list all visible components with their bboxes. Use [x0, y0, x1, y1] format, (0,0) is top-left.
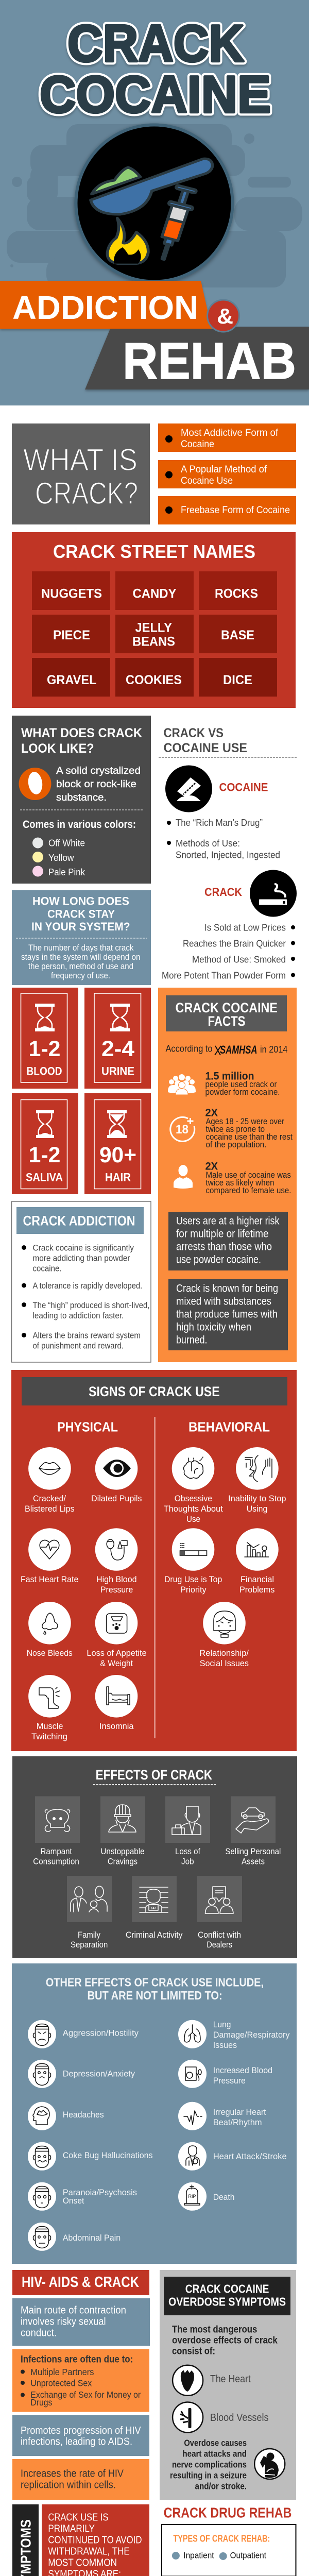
heading	[21, 726, 142, 756]
stat: blood 1-2: BLOOD	[27, 1064, 62, 1078]
text block: infections: Exchange of Sex for Money or	[30, 2389, 141, 2400]
fact: ages 18-25: twice as prone to	[206, 1125, 265, 1134]
effect: paranoia: Onset	[63, 2196, 84, 2206]
fact: 1.5 million: people used crack or	[205, 1080, 277, 1089]
text block: promotes progression: Promotes progression of HIV	[21, 2425, 141, 2436]
fact: 1.5 million	[205, 1071, 280, 1097]
panel: other effects of crack use	[12, 1963, 297, 2264]
effect: abdominal pain	[28, 2223, 121, 2251]
effect: paranoia: Paranoia/Psychosis	[63, 2188, 137, 2197]
heading: EFFECTS OF CRACK	[96, 1767, 212, 1783]
cocaine list: Snorted, Injected, Ingested	[176, 850, 280, 860]
fact: male use: compared to female use.	[206, 1186, 291, 1195]
effect: headaches: Headaches	[63, 2110, 104, 2120]
sign: cracked lips: Cracked/	[33, 1494, 66, 1503]
sign: cracked lips: Blistered Lips	[25, 1504, 75, 1514]
effect: depression	[28, 2060, 135, 2088]
callout: toxic fumes: mixed with substances	[176, 1295, 271, 1308]
heading: OTHER EFFECTS OF CRACK USE INCLUDE,	[46, 1975, 264, 1989]
effect: irregular heart beat: Beat/Rhythm	[213, 2117, 262, 2127]
column headings: PHYSICAL	[57, 1419, 118, 1434]
heading: CRACK STAY	[47, 908, 115, 920]
text block: infections	[12, 2349, 149, 2412]
text block: infections: Multiple Partners	[30, 2367, 94, 2377]
source line: According to	[166, 1044, 212, 1054]
icon: blood vessels	[173, 2402, 203, 2433]
source line	[166, 1043, 287, 1056]
smoke shapes behind the icon	[7, 124, 302, 287]
heading	[22, 1377, 287, 1405]
sign: relationship issues: Social Issues	[200, 1658, 249, 1668]
fact: ages 18-25: cocaine use than the rest	[206, 1132, 293, 1142]
panel: what is crack bullets: Cocaine Use	[181, 475, 233, 486]
consequence text: nerve complications	[172, 2460, 247, 2470]
sign: insomnia: Insomnia	[99, 1721, 134, 1731]
stat: saliva 1-2: SALIVA	[26, 1171, 63, 1184]
heading: HIV- AIDS & CRACK	[22, 2274, 139, 2291]
banner: addiction	[0, 281, 212, 329]
description: stays in the system will depend on	[21, 953, 140, 962]
effect: lung damage: Damage/Respiratory	[213, 2030, 290, 2040]
bullet list: leading to addiction faster.	[33, 1311, 124, 1320]
effect: family separation: Separation	[71, 1940, 108, 1950]
colors list	[23, 819, 136, 877]
sign: obsessive thoughts	[164, 1447, 223, 1524]
heading: SIGNS OF CRACK USE	[89, 1384, 220, 1399]
crack label: CRACK	[204, 886, 242, 899]
stat: blood 1-2	[12, 988, 78, 1089]
crack list: Is Sold at Low Prices	[204, 922, 286, 933]
heading	[164, 726, 247, 755]
consequence text: heart attacks and	[182, 2448, 247, 2459]
description	[21, 943, 140, 980]
title: crack cocaine: COCAINE	[40, 66, 271, 124]
effect: conflict with dealers: Conflict with	[198, 1930, 241, 1940]
box: types of rehab: TYPES OF CRACK REHAB:	[173, 2534, 270, 2544]
panel: overdose symptoms: Blood Vessels	[210, 2412, 269, 2424]
sign: loss of appetite	[87, 1602, 147, 1668]
column headings	[57, 1419, 270, 1434]
effect: lung damage	[178, 2020, 290, 2050]
title: crack cocaine	[40, 15, 271, 124]
effect: heart attack or stroke: Heart Attack/Stroke	[213, 2151, 287, 2161]
consequence text	[170, 2438, 247, 2492]
panel: crack street names: COOKIES	[126, 673, 182, 687]
fact: male use: twice as likely when	[206, 1178, 274, 1188]
heading	[164, 2277, 290, 2315]
fact: 1.5 million: 1.5 million	[205, 1071, 254, 1082]
panel: overdose symptoms	[160, 2270, 296, 2500]
effect: criminal activity	[126, 1876, 183, 1940]
bullet list: Crack cocaine is significantly	[33, 1243, 134, 1253]
bullet list	[22, 1243, 149, 1351]
intro text: CRACK USE IS	[48, 2512, 108, 2523]
description: block or rock-like	[56, 779, 136, 790]
column headings: BEHAVIORAL	[188, 1419, 270, 1434]
heading: CRACK COCAINE	[175, 1000, 278, 1015]
sign: insomnia	[95, 1675, 138, 1731]
effect: unstoppable cravings: Unstoppable	[101, 1847, 144, 1856]
sign: fast heart rate: Fast Heart Rate	[21, 1574, 78, 1584]
box: types of rehab: Inpatient	[183, 2550, 214, 2561]
ampersand badge: &	[217, 304, 233, 328]
heading: CRACK VS	[164, 726, 224, 740]
intro text	[172, 2325, 278, 2357]
callout: toxic fumes: high toxicity when	[176, 1321, 251, 1333]
effect: coke bug hallucinations: Coke Bug Hallucinations	[63, 2150, 153, 2160]
box: types of rehab	[162, 2524, 296, 2576]
heading	[31, 894, 130, 933]
sign: financial problems: Problems	[239, 1585, 274, 1595]
icon: crack rock	[19, 768, 52, 800]
stat: hair 90+: 90+	[99, 1143, 136, 1167]
effect: loss of job	[165, 1796, 210, 1866]
text block: infections: Infections are often due to:	[21, 2353, 133, 2365]
panel: crack street names: NUGGETS	[41, 586, 102, 601]
stat: urine 2-4: 2-4	[101, 1037, 134, 1061]
panel: crack street names: GRAVEL	[47, 673, 97, 687]
callout: toxic fumes: Crack is known for being	[176, 1283, 278, 1294]
callout: toxic fumes	[168, 1279, 288, 1350]
effect: rampant consumption: Rampant	[40, 1847, 72, 1856]
description: the person, method of use and	[28, 962, 133, 971]
panel: crack street names	[12, 532, 296, 708]
bullet list: Alters the brains reward system	[33, 1330, 141, 1341]
heading	[46, 1975, 264, 2002]
panel: crack cocaine facts	[158, 988, 297, 1362]
cocaine list: The “Rich Man’s Drug”	[176, 818, 263, 828]
callout: arrests: use powder cocaine.	[176, 1254, 261, 1265]
fact: male use: 2X	[205, 1160, 218, 1173]
description: substance.	[56, 792, 107, 803]
icon: spoon, flame and syringe in a black circle	[74, 124, 234, 283]
sign: high blood pressure: Pressure	[100, 1585, 133, 1595]
panel: how long does crack stay	[12, 890, 151, 985]
effect: conflict with dealers	[197, 1876, 242, 1950]
panel: what is crack bullets: Cocaine	[181, 438, 214, 450]
heading: CRACK STREET NAMES	[53, 541, 255, 562]
heading	[16, 1207, 144, 1234]
effect: depression: Depression/Anxiety	[63, 2069, 135, 2078]
title: crack cocaine: COCAINE	[40, 66, 271, 124]
effect: death	[178, 2182, 234, 2211]
crack list: Method of Use: Smoked	[192, 954, 286, 964]
text block: main route: Main route of contraction	[21, 2305, 126, 2316]
cocaine list	[167, 818, 280, 860]
sign: loss of appetite: & Weight	[100, 1658, 133, 1668]
icon: smoking cigarette	[250, 870, 297, 917]
panel: hiv aids and crack	[12, 2270, 150, 2500]
sign: cracked lips	[25, 1447, 75, 1514]
stat: hair 90+	[84, 1093, 151, 1194]
fact: ages 18-25	[205, 1107, 293, 1149]
heading: CRACK ADDICTION	[23, 1213, 135, 1228]
effect: increased blood pressure: Increased Blood	[213, 2065, 272, 2075]
text block: main route: conduct.	[21, 2328, 57, 2339]
effect: unstoppable cravings: Cravings	[108, 1857, 138, 1866]
title: crack cocaine: CRACK	[67, 15, 244, 73]
callout: toxic fumes: burned.	[176, 1334, 207, 1346]
sign: dilated pupils	[91, 1447, 142, 1503]
sign: fast heart rate	[21, 1528, 78, 1584]
callout: toxic fumes: that produce fumes with	[176, 1309, 278, 1320]
effect: irregular heart beat	[178, 2102, 266, 2130]
sign: drug use top priority	[164, 1528, 222, 1595]
text block: infections: Unprotected Sex	[30, 2378, 92, 2388]
bullet list: The “high” produced is short-lived,	[33, 1300, 149, 1310]
intro text: MOST COMMON	[48, 2557, 117, 2569]
consequence text: Overdose causes	[184, 2438, 247, 2448]
icon: hourglass	[35, 1004, 55, 1031]
banner: addiction: ADDICTION	[12, 289, 198, 326]
banner: rehab: REHAB	[123, 332, 296, 390]
effect: selling personal assets: Selling Personal	[225, 1847, 281, 1856]
stat: hair 90+: HAIR	[105, 1171, 131, 1184]
effect: selling personal assets	[225, 1796, 281, 1866]
panel: what is crack bullets: Freebase Form of Cocaine	[181, 504, 290, 516]
sign: muscle twitching: Twitching	[31, 1732, 67, 1741]
effect: coke bug hallucinations	[28, 2142, 153, 2171]
sign: nose bleeds: Nose Bleeds	[27, 1648, 73, 1658]
stat: urine 2-4: URINE	[101, 1064, 134, 1078]
consequence text: resulting in a seizure	[170, 2470, 247, 2480]
effect: selling personal assets: Assets	[242, 1857, 265, 1866]
panel: effects of crack	[12, 1756, 297, 1958]
text block: promotes progression	[12, 2415, 149, 2456]
text block: promotes progression: infections, leading to AIDS.	[21, 2436, 132, 2447]
bullet list: more addicting than powder	[33, 1253, 130, 1263]
panel: crack street names: JELLY	[135, 620, 172, 635]
effect: irregular heart beat: Irregular Heart	[213, 2107, 266, 2117]
effect: heart attack or stroke	[178, 2142, 287, 2171]
source line: SAMHSA	[220, 1043, 258, 1056]
bullet list: of punishment and reward.	[33, 1341, 124, 1351]
panel: what is crack bullets: A Popular Method of	[181, 464, 267, 475]
effect: family separation: Family	[78, 1930, 101, 1940]
description: A solid crystalized	[56, 766, 141, 776]
text block: replication: replication within cells.	[21, 2479, 116, 2490]
heading: BUT ARE NOT LIMITED TO:	[88, 1989, 222, 2002]
heading: OVERDOSE SYMPTOMS	[168, 2295, 286, 2308]
intro text: The most dangerous	[172, 2325, 257, 2335]
panel: crack street names: ROCKS	[215, 586, 258, 601]
sign: high blood pressure	[95, 1528, 138, 1595]
box: types of rehab: Outpatient	[230, 2550, 266, 2561]
effect: criminal activity: Criminal Activity	[126, 1930, 183, 1940]
effect: family separation	[67, 1876, 112, 1950]
effect: lung damage: Issues	[213, 2040, 237, 2050]
fact: ages 18-25: Ages 18 - 25 were over	[206, 1117, 284, 1126]
sign: muscle twitching	[28, 1675, 71, 1741]
icon: hourglass	[107, 1110, 127, 1138]
fact: 1.5 million: powder form cocaine.	[205, 1088, 280, 1097]
colors list: Pale Pink	[48, 867, 85, 877]
colors list: Off White	[48, 838, 85, 848]
sign: loss of appetite: Loss of Appetite	[87, 1648, 147, 1658]
icon: male figure	[174, 1165, 193, 1189]
sign: muscle twitching: Muscle	[37, 1721, 63, 1731]
sign: inability to stop: Using	[247, 1504, 267, 1514]
sign: nose bleeds	[27, 1602, 73, 1658]
crack list	[162, 922, 295, 981]
stat: blood 1-2: 1-2	[29, 1037, 61, 1061]
effect: rampant consumption: Consumption	[33, 1857, 79, 1866]
icon: hourglass	[36, 1110, 54, 1138]
heading	[166, 995, 287, 1031]
ampersand badge	[208, 300, 239, 332]
intro text	[48, 2512, 142, 2576]
heading: CRACK COCAINE	[185, 2282, 269, 2296]
effect: headaches	[28, 2102, 104, 2130]
panel: crack vs cocaine use	[159, 726, 297, 981]
text block: main route	[12, 2298, 150, 2346]
intro text: CONTINUED TO AVOID	[48, 2535, 142, 2546]
text block: infections: Drugs	[30, 2397, 53, 2408]
heading: LOOK LIKE?	[21, 741, 94, 756]
text block: replication: Increases the rate of HIV	[21, 2468, 124, 2479]
stat: saliva 1-2	[12, 1093, 78, 1194]
bullet list: A tolerance is rapidly developed.	[33, 1281, 142, 1291]
effect: abdominal pain: Abdominal Pain	[63, 2233, 121, 2243]
cocaine label: COCAINE	[219, 781, 268, 793]
fact: ages 18-25: 2X	[205, 1107, 218, 1119]
effect: paranoia	[28, 2182, 137, 2211]
heading: FACTS	[208, 1013, 245, 1029]
crack list: Reaches the Brain Quicker	[183, 939, 286, 949]
panel: crack addiction	[11, 1201, 151, 1362]
text block: replication	[12, 2459, 149, 2500]
effect: rampant consumption	[33, 1796, 80, 1866]
title: crack cocaine: CRACK	[67, 15, 244, 73]
icon: 18 plus	[170, 1117, 195, 1141]
fact: ages 18-25: of the population.	[206, 1140, 267, 1149]
sign: high blood pressure: High Blood	[96, 1574, 137, 1584]
heading: HOW LONG DOES	[32, 894, 129, 908]
effect: aggression: Aggression/Hostility	[63, 2028, 139, 2038]
consequence text: and/or stroke.	[195, 2481, 247, 2492]
heading: COCAINE USE	[164, 741, 247, 755]
colors list: Comes in various colors:	[23, 819, 136, 831]
panel: crack street names: CANDY	[133, 586, 177, 601]
panel: what is crack bullets	[158, 423, 296, 524]
text block: main route: involves risky sexual	[21, 2316, 106, 2328]
panel: what does crack look like	[12, 716, 151, 884]
sign: inability to stop	[228, 1447, 286, 1514]
panel: signs of crack use	[11, 1370, 297, 1751]
effect: death: Death	[213, 2192, 234, 2202]
effect: loss of job: Loss of	[175, 1847, 200, 1856]
callout: arrests: arrests than those who	[176, 1241, 272, 1253]
stat: saliva 1-2: 1-2	[29, 1143, 61, 1167]
intro text: consist of:	[172, 2346, 215, 2357]
cocaine list: Methods of Use:	[176, 838, 240, 849]
panel: crack street names: BEANS	[132, 635, 175, 649]
intro text: overdose effects of crack	[172, 2335, 278, 2346]
effect: unstoppable cravings	[100, 1796, 145, 1866]
callout: arrests: Users are at a higher risk	[176, 1215, 280, 1227]
sign: financial problems: Financial	[241, 1574, 274, 1584]
sign: financial problems	[236, 1528, 279, 1595]
effect: increased blood pressure	[178, 2060, 272, 2088]
panel: what is crack	[12, 423, 150, 524]
heading: WHAT DOES CRACK	[21, 726, 142, 740]
sign: relationship issues	[199, 1602, 249, 1668]
effect: aggression	[28, 2020, 139, 2048]
sign: obsessive thoughts: Use	[186, 1514, 200, 1524]
callout: arrests	[168, 1212, 288, 1270]
icon: razor blade and powder	[165, 766, 212, 812]
description: The number of days that crack	[28, 943, 134, 953]
description: frequency of use.	[51, 971, 110, 980]
panel: crack drug rehab	[162, 2505, 296, 2576]
icon: 18 plus: 18	[176, 1123, 188, 1137]
fact: male use: Male use of cocaine was	[206, 1171, 291, 1180]
intro text: PRIMARILY	[48, 2523, 95, 2535]
intro text: WITHDRAWAL, THE	[48, 2546, 130, 2557]
source line: in 2014	[260, 1044, 287, 1055]
stat: urine 2-4	[84, 988, 151, 1089]
sign: drug use top priority: Drug Use is Top	[164, 1574, 222, 1584]
sign: dilated pupils: Dilated Pupils	[91, 1494, 142, 1503]
panel: what is crack: WHAT IS	[23, 443, 138, 477]
icon: hourglass	[110, 1004, 130, 1031]
icon: seizure	[254, 2449, 285, 2479]
panel: what is crack: CRACK?	[35, 476, 138, 511]
effect: death: RIP	[188, 2194, 196, 2199]
panel: crack street names: BASE	[221, 628, 254, 642]
effect: criminal activity: 147	[151, 1907, 156, 1910]
panel: crack street names: PIECE	[53, 628, 90, 642]
sign: obsessive thoughts: Thoughts About	[164, 1504, 223, 1514]
bullet list: cocaine.	[33, 1263, 62, 1274]
panel: overdose symptoms: The Heart	[210, 2374, 251, 2385]
sign: obsessive thoughts: Obsessive	[175, 1494, 212, 1503]
panel: crack street names: DICE	[223, 673, 252, 687]
heading	[12, 2270, 149, 2295]
effect: loss of job: Job	[181, 1857, 194, 1866]
panel: crack withdrawal symptoms	[12, 2504, 149, 2576]
effect: lung damage: Lung	[213, 2020, 231, 2029]
sign: relationship issues: Relationship/	[199, 1648, 249, 1658]
sign: inability to stop: Inability to Stop	[228, 1494, 286, 1503]
effect: increased blood pressure: Pressure	[213, 2076, 246, 2086]
callout: arrests: for multiple or lifetime	[176, 1228, 269, 1240]
icon: crowd	[168, 1074, 196, 1095]
sign: drug use top priority: Priority	[180, 1585, 207, 1595]
colors list: Yellow	[48, 852, 74, 863]
header background	[0, 0, 309, 405]
description	[56, 766, 141, 803]
icon: heart	[173, 2365, 203, 2396]
fact: male use	[205, 1160, 291, 1195]
panel: what is crack bullets: Most Addictive Form of	[181, 427, 279, 438]
heading: IN YOUR SYSTEM?	[31, 920, 130, 933]
effect: conflict with dealers: Dealers	[207, 1940, 232, 1950]
crack list: More Potent Than Powder Form	[162, 971, 286, 981]
